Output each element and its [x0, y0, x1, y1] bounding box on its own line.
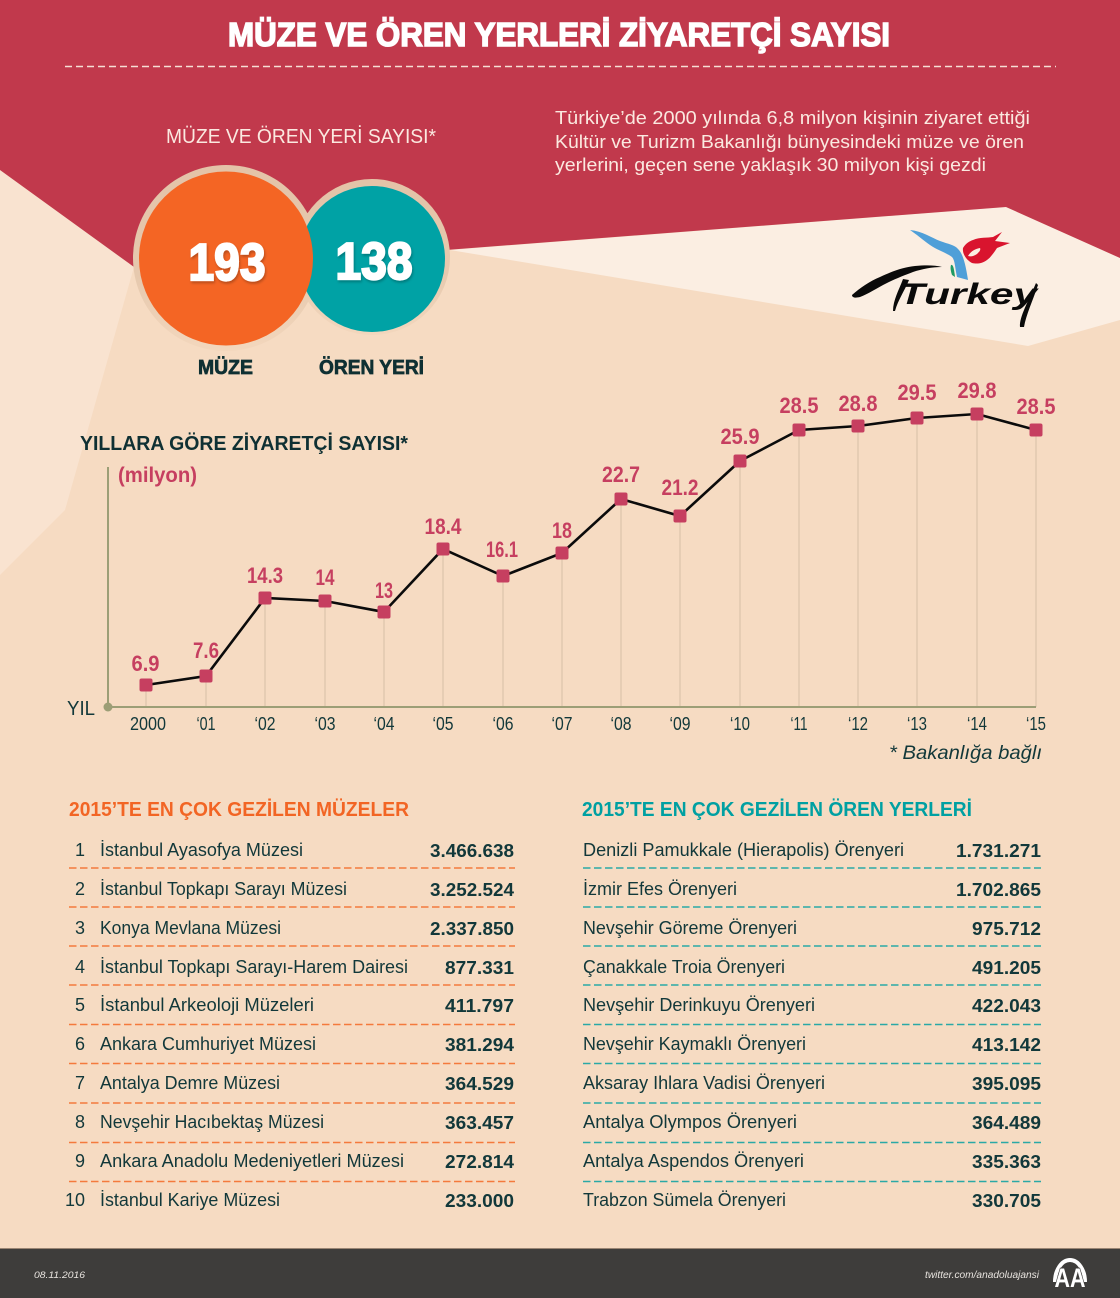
site row 2: 1.702.865	[956, 880, 1041, 900]
site row 4: Çanakkale Troia Örenyeri	[583, 957, 785, 977]
year labels: ‘15	[1026, 714, 1046, 734]
site row 1: 1.731.271	[956, 841, 1041, 861]
site row 6: 413.142	[972, 1035, 1041, 1055]
date: 08.11.2016	[34, 1270, 86, 1281]
year labels: ‘12	[848, 714, 868, 734]
site row 10: 330.705	[972, 1191, 1041, 1211]
site row 1: Denizli Pamukkale (Hierapolis) Örenyeri	[583, 840, 904, 860]
site row 8: 364.489	[972, 1113, 1041, 1133]
icon: AA logo: AA	[1054, 1263, 1086, 1293]
footnote: * Bakanlığa bağlı	[889, 743, 1042, 764]
red header panel	[0, 0, 1120, 267]
label: ören yeri: ÖREN YERİ	[319, 356, 424, 379]
site row 6: Nevşehir Kaymaklı Örenyeri	[583, 1034, 806, 1054]
data markers	[140, 408, 1042, 692]
site row 3: Nevşehir Göreme Örenyeri	[583, 918, 797, 938]
logo: Turkey	[852, 230, 1039, 327]
row 6: 6	[75, 1034, 85, 1054]
row 8: 8	[75, 1112, 85, 1132]
row 6: 381.294	[445, 1035, 514, 1055]
site row 7: 395.095	[972, 1074, 1041, 1094]
heading: museums: 2015’TE EN ÇOK GEZİLEN MÜZELER	[69, 798, 410, 821]
row 10	[65, 1190, 514, 1211]
data values: 6.9	[132, 651, 160, 676]
year labels: ‘08	[610, 714, 632, 734]
year labels: ‘14	[967, 714, 987, 734]
row 7: Antalya Demre Müzesi	[100, 1073, 280, 1093]
data values: 29.5	[898, 380, 936, 405]
site row 8: Antalya Olympos Örenyeri	[583, 1112, 797, 1132]
row 1: 1	[75, 840, 85, 860]
row 8: Nevşehir Hacıbektaş Müzesi	[100, 1112, 324, 1132]
row 3: Konya Mevlana Müzesi	[100, 918, 281, 938]
site row 2	[583, 879, 1041, 900]
unit label: (milyon)	[118, 464, 197, 487]
year labels: ‘09	[670, 714, 690, 734]
data values: 28.5	[1016, 394, 1056, 419]
circle: müze	[139, 172, 313, 346]
year labels: ‘10	[730, 714, 750, 734]
row 7: 364.529	[445, 1074, 514, 1094]
site row 9	[583, 1151, 1041, 1172]
row 5	[75, 995, 514, 1016]
site row 5: 422.043	[972, 996, 1041, 1016]
row 6	[75, 1034, 514, 1055]
row 9: 9	[75, 1151, 85, 1171]
intro paragraph: yerlerini, geçen sene yaklaşık 30 milyon kişi gezdi	[555, 155, 986, 175]
data values: 25.9	[720, 424, 760, 449]
panel: top archaeological sites	[582, 798, 1041, 1211]
site row 1	[583, 840, 1041, 861]
data values: 16.1	[486, 537, 518, 562]
data values	[132, 378, 1056, 676]
site row 4	[583, 957, 1041, 978]
row 10: İstanbul Kariye Müzesi	[100, 1190, 280, 1210]
intro paragraph: Türkiye’de 2000 yılında 6,8 milyon kişinin ziyaret ettiği	[555, 108, 1030, 128]
data line	[146, 414, 1036, 685]
row 5: 5	[75, 995, 85, 1015]
footer bar	[0, 1248, 1120, 1298]
site row 9: 335.363	[972, 1152, 1041, 1172]
row 5: İstanbul Arkeoloji Müzeleri	[100, 995, 314, 1015]
data values: 14.3	[247, 563, 283, 588]
title: MÜZE VE ÖREN YERLERİ ZİYARETÇİ SAYISI	[228, 16, 890, 53]
site row 8	[583, 1112, 1041, 1133]
year labels: ‘06	[492, 714, 514, 734]
twitter handle: twitter.com/anadoluajansi	[925, 1269, 1040, 1281]
site row 6	[583, 1034, 1041, 1055]
row 2	[75, 879, 514, 900]
row 7	[75, 1073, 514, 1094]
data values: 22.7	[602, 462, 640, 487]
year labels	[130, 714, 1046, 734]
site row 5	[583, 995, 1041, 1016]
intro paragraph: Kültür ve Turizm Bakanlığı bünyesindeki müze ve ören	[555, 132, 1024, 152]
row 1: 3.466.638	[430, 841, 514, 861]
panel: top museums	[65, 798, 515, 1211]
row 10: 10	[65, 1190, 85, 1210]
year labels: ‘02	[254, 714, 276, 734]
chart heading: YILLARA GÖRE ZİYARETÇİ SAYISI*	[80, 432, 408, 455]
row 3: 3	[75, 918, 85, 938]
row 4: İstanbul Topkapı Sarayı-Harem Dairesi	[100, 957, 408, 977]
data values: 7.6	[193, 638, 219, 663]
site row 3	[583, 918, 1041, 939]
site row 7	[583, 1073, 1041, 1094]
data values: 18.4	[424, 514, 462, 539]
circles: counts	[133, 165, 450, 351]
row 9	[75, 1151, 514, 1172]
row 10: 233.000	[445, 1191, 514, 1211]
site row 9: Antalya Aspendos Örenyeri	[583, 1151, 804, 1171]
year labels: ‘03	[314, 714, 336, 734]
circle: ören yeri	[299, 186, 445, 332]
site row 2: İzmir Efes Örenyeri	[583, 879, 737, 899]
data values: 14	[316, 565, 335, 590]
site row 10	[583, 1190, 1041, 1211]
year labels: ‘11	[790, 714, 808, 734]
year labels: 2000	[130, 714, 166, 734]
year labels: ‘01	[196, 714, 216, 734]
row 4: 4	[75, 957, 85, 977]
label: müze: MÜZE	[198, 356, 253, 379]
row 4: 877.331	[445, 958, 514, 978]
row 3: 2.337.850	[430, 919, 514, 939]
row 9: 272.814	[445, 1152, 514, 1172]
row 8	[75, 1112, 514, 1133]
row 3	[75, 918, 514, 939]
data values: 29.8	[958, 378, 996, 403]
number: 193: 193	[188, 234, 266, 292]
row 2: İstanbul Topkapı Sarayı Müzesi	[100, 879, 347, 899]
number: 138: 138	[336, 233, 412, 291]
data values: 28.8	[838, 391, 878, 416]
heading: sites: 2015’TE EN ÇOK GEZİLEN ÖREN YERLERİ	[582, 798, 972, 821]
row 1: İstanbul Ayasofya Müzesi	[100, 840, 303, 860]
subheading: museum and site count: MÜZE VE ÖREN YERİ SAYISI*	[166, 125, 436, 148]
year labels: ‘05	[432, 714, 454, 734]
data values: 13	[375, 578, 393, 603]
row 9: Ankara Anadolu Medeniyetleri Müzesi	[100, 1151, 404, 1171]
line chart	[67, 378, 1056, 734]
intro paragraph	[555, 108, 1030, 175]
site row 4: 491.205	[972, 958, 1041, 978]
site row 7: Aksaray Ihlara Vadisi Örenyeri	[583, 1073, 825, 1093]
site row 10: Trabzon Sümela Örenyeri	[583, 1190, 786, 1210]
axis label: yıl: YIL	[67, 698, 95, 720]
row 7: 7	[75, 1073, 85, 1093]
axes	[108, 467, 1036, 707]
data values: 21.2	[662, 475, 698, 500]
row 4	[75, 957, 514, 978]
row 6: Ankara Cumhuriyet Müzesi	[100, 1034, 316, 1054]
data values: 18	[552, 518, 572, 543]
row 2: 2	[75, 879, 85, 899]
year labels: ‘13	[907, 714, 927, 734]
row 5: 411.797	[445, 996, 514, 1016]
row 1	[75, 840, 514, 861]
logo: Turkey: Turkey	[899, 278, 1039, 311]
data values: 28.5	[780, 393, 818, 418]
year labels: ‘07	[552, 714, 572, 734]
row 2: 3.252.524	[430, 880, 514, 900]
site row 3: 975.712	[972, 919, 1041, 939]
year labels: ‘04	[374, 714, 394, 734]
row 8: 363.457	[445, 1113, 514, 1133]
site row 5: Nevşehir Derinkuyu Örenyeri	[583, 995, 815, 1015]
